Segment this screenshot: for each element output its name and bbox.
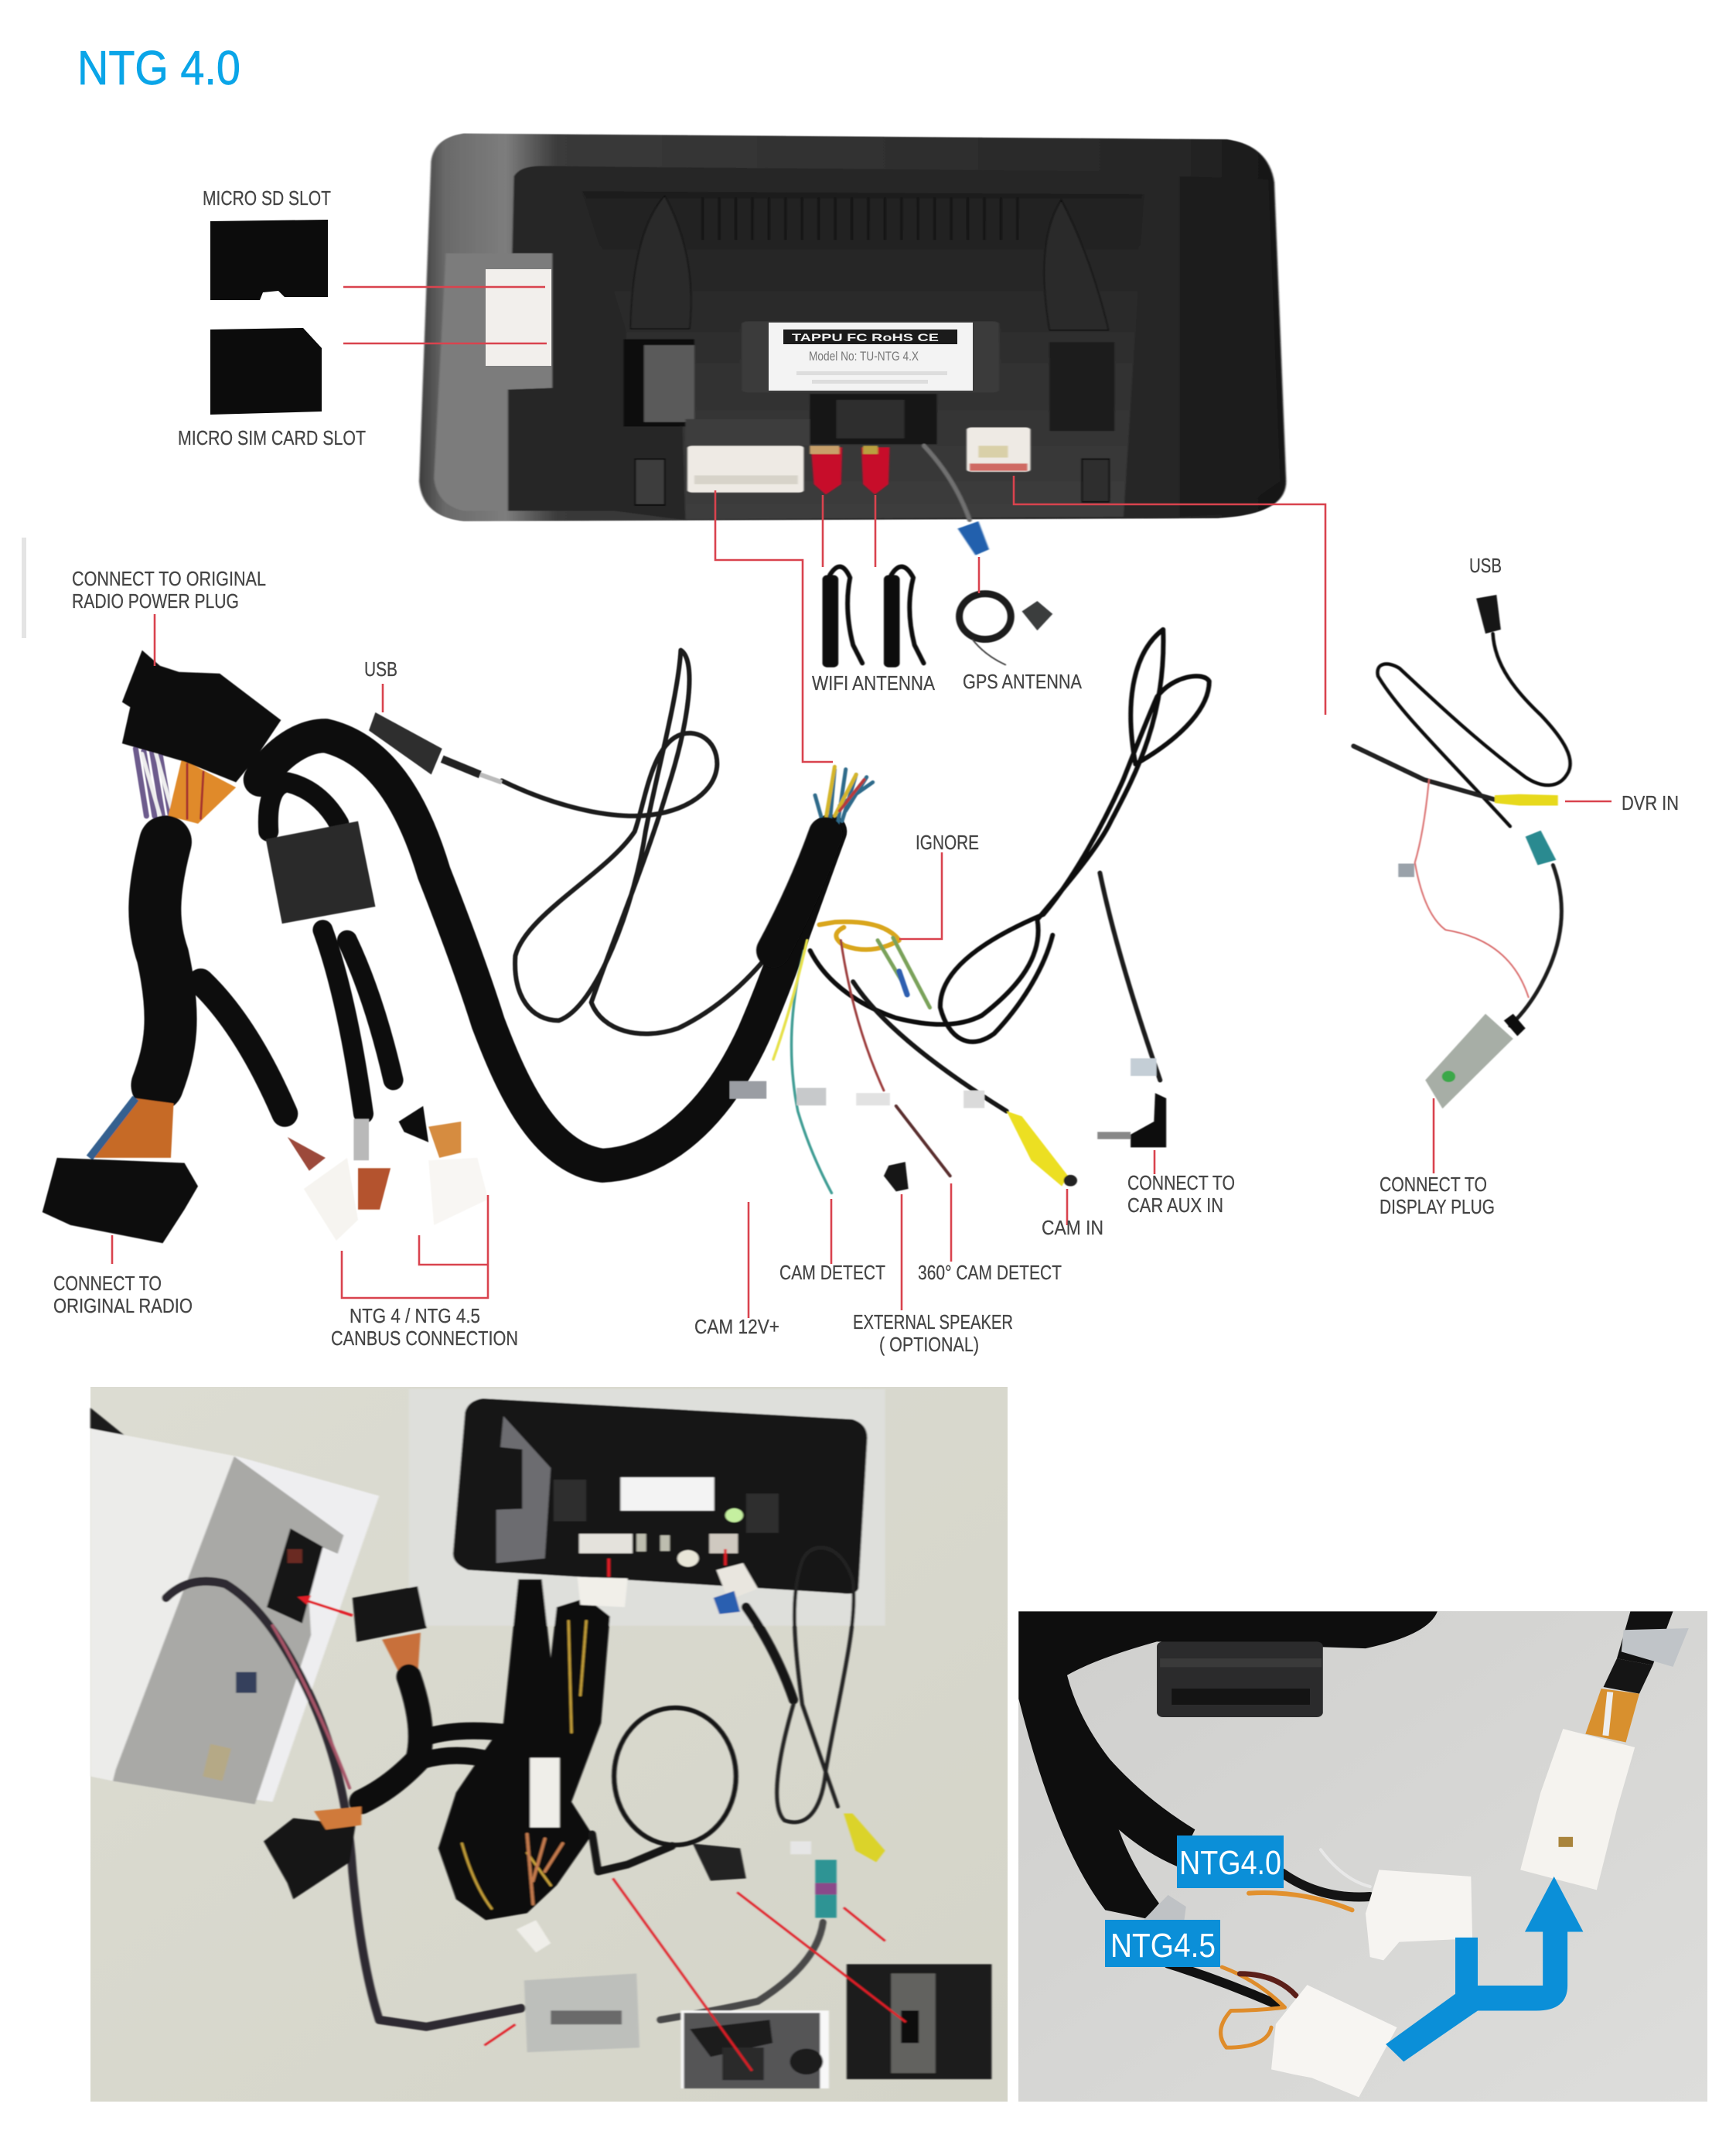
white connector lower — [517, 1920, 551, 1952]
aux lead — [1100, 873, 1160, 1080]
DVR / display harness — [1353, 595, 1571, 1108]
fakra blue — [714, 1591, 740, 1614]
metal radio body — [113, 1456, 343, 1805]
screen connector — [579, 1534, 633, 1553]
module box — [266, 821, 375, 924]
main bundle — [438, 1579, 610, 1920]
labels: DISPLAY PLUG — [1380, 1195, 1495, 1218]
left recess — [623, 340, 694, 426]
module sleeves — [322, 930, 363, 1114]
left edge shadow — [22, 538, 26, 638]
radio lower socket — [203, 1744, 231, 1781]
DVR RCA — [1495, 794, 1558, 805]
white connector on bundle — [530, 1758, 560, 1827]
labels: CONNECT TO — [53, 1272, 162, 1295]
inset A — [681, 2010, 829, 2088]
connector clip — [810, 394, 937, 444]
white box — [90, 1429, 237, 1781]
tag — [963, 1091, 984, 1108]
aux tag — [1131, 1058, 1156, 1076]
radio upper socket — [236, 1672, 257, 1693]
vents — [703, 197, 1018, 240]
arrow: up to connector — [607, 1559, 610, 1577]
white upper connector — [578, 1577, 628, 1607]
arrow: to radio — [305, 1600, 353, 1616]
right part of harness and antennas — [773, 567, 1209, 1193]
tag — [790, 1841, 811, 1854]
head unit connectors — [687, 428, 1031, 555]
product label plate: TAPPU FC RoHS CE — [792, 331, 939, 343]
USB lead — [502, 651, 786, 1034]
module strap — [268, 782, 339, 832]
right dark edge — [1180, 176, 1281, 517]
logo band — [783, 330, 957, 344]
labels: EXTERNAL SPEAKER — [853, 1310, 1013, 1334]
USB plug — [369, 712, 442, 774]
screen recess — [554, 1480, 586, 1521]
right connector — [709, 1534, 738, 1553]
title: NTG 4.0 — [77, 42, 240, 95]
fakra teal — [815, 1859, 837, 1917]
GPS lead — [924, 446, 970, 520]
product label plate — [769, 323, 973, 391]
aux plug — [1131, 1093, 1166, 1147]
labels — [53, 554, 1679, 1356]
NTG4.0 wires — [1283, 1873, 1370, 1897]
labels: USB — [364, 657, 397, 681]
inset B — [847, 1964, 991, 2079]
NTG4.5 connector — [1271, 1985, 1397, 2097]
head unit rear view — [419, 134, 1286, 521]
USB plug — [1476, 595, 1501, 633]
arrow: aux to inset — [613, 1878, 752, 2071]
display lead — [746, 1607, 793, 1700]
display lead to decoder — [660, 1922, 823, 2020]
ignore wires — [820, 922, 899, 950]
main lead — [1510, 865, 1561, 1026]
harness to radio — [166, 1581, 521, 2027]
labels: CAM DETECT — [779, 1261, 885, 1284]
left grey recess — [434, 254, 552, 511]
tag — [1144, 1895, 1186, 1924]
cam 12v wire — [773, 941, 807, 1060]
sleeve end — [773, 834, 825, 951]
product label plate: Model No: TU-NTG 4.X — [809, 349, 919, 364]
arrow: fakra — [844, 1907, 885, 1941]
GPS antenna — [960, 594, 1052, 664]
central panel — [582, 191, 1144, 519]
decoder box — [1425, 1014, 1513, 1108]
left bracket — [630, 196, 691, 329]
black cable to aux loops — [810, 630, 1209, 1042]
round sticker — [677, 1550, 699, 1567]
arrow: usb to inset — [737, 1892, 906, 2022]
blue arrow — [1386, 1877, 1583, 2061]
speaker plug — [884, 1162, 909, 1191]
can connectors — [304, 1158, 358, 1241]
Y harness — [361, 1677, 421, 1802]
bundle wires — [462, 1621, 586, 1908]
labels: DVR IN — [1622, 791, 1679, 814]
unit body — [419, 134, 1286, 521]
photo 1: installation overview — [90, 1387, 1008, 2102]
labels: CONNECT TO — [1380, 1173, 1487, 1196]
usb plug — [693, 1843, 746, 1880]
tag — [796, 1088, 826, 1105]
radio connector — [264, 1818, 356, 1899]
grey bracket — [496, 1416, 551, 1563]
radio connector — [43, 1158, 198, 1243]
labels: RADIO POWER PLUG — [72, 589, 239, 613]
left slot — [635, 459, 665, 505]
thick lead — [1353, 746, 1498, 801]
labels: ( OPTIONAL) — [879, 1333, 979, 1356]
labels: WIFI ANTENNA — [812, 671, 936, 695]
NTG4.0 connector — [1366, 1870, 1472, 1960]
icon: micro SD card — [210, 220, 328, 300]
top right connector — [1520, 1729, 1635, 1890]
copper wires — [527, 1834, 563, 1904]
screen label — [621, 1477, 714, 1511]
main wiring harness — [43, 651, 830, 1243]
NTG4.5 sleeve — [1168, 1964, 1276, 2004]
labels: GPS ANTENNA — [963, 670, 1083, 693]
lower dark step — [685, 419, 810, 446]
label: NTG4.0 — [1177, 1836, 1284, 1888]
labels: USB — [1469, 554, 1502, 577]
NTG4.5 wires — [1221, 1967, 1284, 2047]
label: micro SIM card slot: MICRO SIM CARD SLOT — [178, 426, 366, 449]
fakra plug — [1526, 831, 1556, 865]
wifi antenna 1 — [823, 575, 838, 668]
label: NTG4.5: NTG4.5 — [1110, 1927, 1216, 1965]
foam — [113, 1456, 379, 1802]
white label on side — [486, 269, 551, 366]
inner top frame — [508, 166, 1197, 520]
wifi antenna sockets — [811, 447, 842, 494]
connector by display — [717, 1563, 758, 1600]
screen back — [453, 1398, 868, 1593]
silver tag — [1622, 1628, 1689, 1667]
lead bundle loops — [777, 1548, 854, 1822]
can wires — [288, 1137, 326, 1171]
photo 2: NTG4.0 / NTG4.5 connector detail — [1018, 1611, 1707, 2102]
label: micro SD slot: MICRO SD SLOT — [203, 186, 331, 210]
labels: CONNECT TO ORIGINAL — [72, 567, 266, 590]
labels: NTG 4 / NTG 4.5 — [350, 1304, 480, 1327]
wifi antenna 2 — [884, 575, 900, 668]
bubble wrap — [409, 1389, 885, 1626]
red wire — [1415, 780, 1529, 997]
arrow: up to right connector — [724, 1549, 727, 1566]
radio slot — [267, 1528, 323, 1624]
labels: 360° CAM DETECT — [918, 1261, 1062, 1284]
ring cable — [614, 1708, 736, 1845]
long sleeve — [261, 736, 830, 1166]
right slot — [1082, 459, 1109, 502]
labels: CAR AUX IN — [1127, 1194, 1223, 1217]
power connector — [122, 651, 281, 782]
labels: CAM 12V+ — [694, 1315, 779, 1338]
top right sleeve — [1617, 1611, 1673, 1665]
leader lines — [112, 287, 1612, 1318]
aux connector socket — [967, 428, 1031, 472]
360 cam lead — [841, 941, 884, 1091]
arrow: decoder — [485, 2024, 515, 2045]
tag — [856, 1093, 890, 1105]
right recess — [1049, 342, 1114, 431]
colored wires — [815, 770, 873, 824]
GPS fakra plug — [958, 521, 989, 555]
connector wires — [382, 1633, 421, 1677]
left sleeve — [155, 842, 171, 1085]
cam detect wire — [791, 951, 831, 1193]
radio wires — [90, 1098, 173, 1158]
cam RCA — [844, 1814, 885, 1862]
labels: CONNECT TO — [1127, 1171, 1235, 1194]
cam in RCA — [1007, 1112, 1068, 1187]
antenna sockets — [636, 1534, 646, 1552]
labels: CAM IN — [1042, 1216, 1103, 1239]
main connector socket — [687, 446, 804, 493]
icon: micro SIM card — [210, 328, 322, 415]
black fleece sleeve — [1018, 1611, 1438, 1918]
CE sticker — [725, 1508, 743, 1522]
labels: CANBUS CONNECTION — [331, 1327, 518, 1350]
cam in lead — [853, 982, 1007, 1112]
left branch — [201, 982, 285, 1114]
power connector — [353, 1586, 427, 1642]
label: NTG4.0: NTG4.0 — [1179, 1844, 1281, 1882]
black corner at top left — [90, 1408, 124, 1436]
labels: IGNORE — [916, 831, 979, 854]
module box — [1157, 1641, 1323, 1717]
decoder box — [524, 1973, 639, 2052]
wires at top of left sleeve — [135, 749, 236, 824]
right bracket — [1044, 200, 1109, 330]
tag — [1398, 863, 1414, 877]
aux extension — [592, 1834, 672, 1871]
labels: ORIGINAL RADIO — [53, 1294, 193, 1317]
small sleeve — [1604, 1658, 1652, 1694]
top right wires — [1585, 1689, 1639, 1743]
plate holder — [742, 322, 999, 392]
small grey tag — [730, 1081, 766, 1098]
usb lead — [1377, 633, 1571, 826]
